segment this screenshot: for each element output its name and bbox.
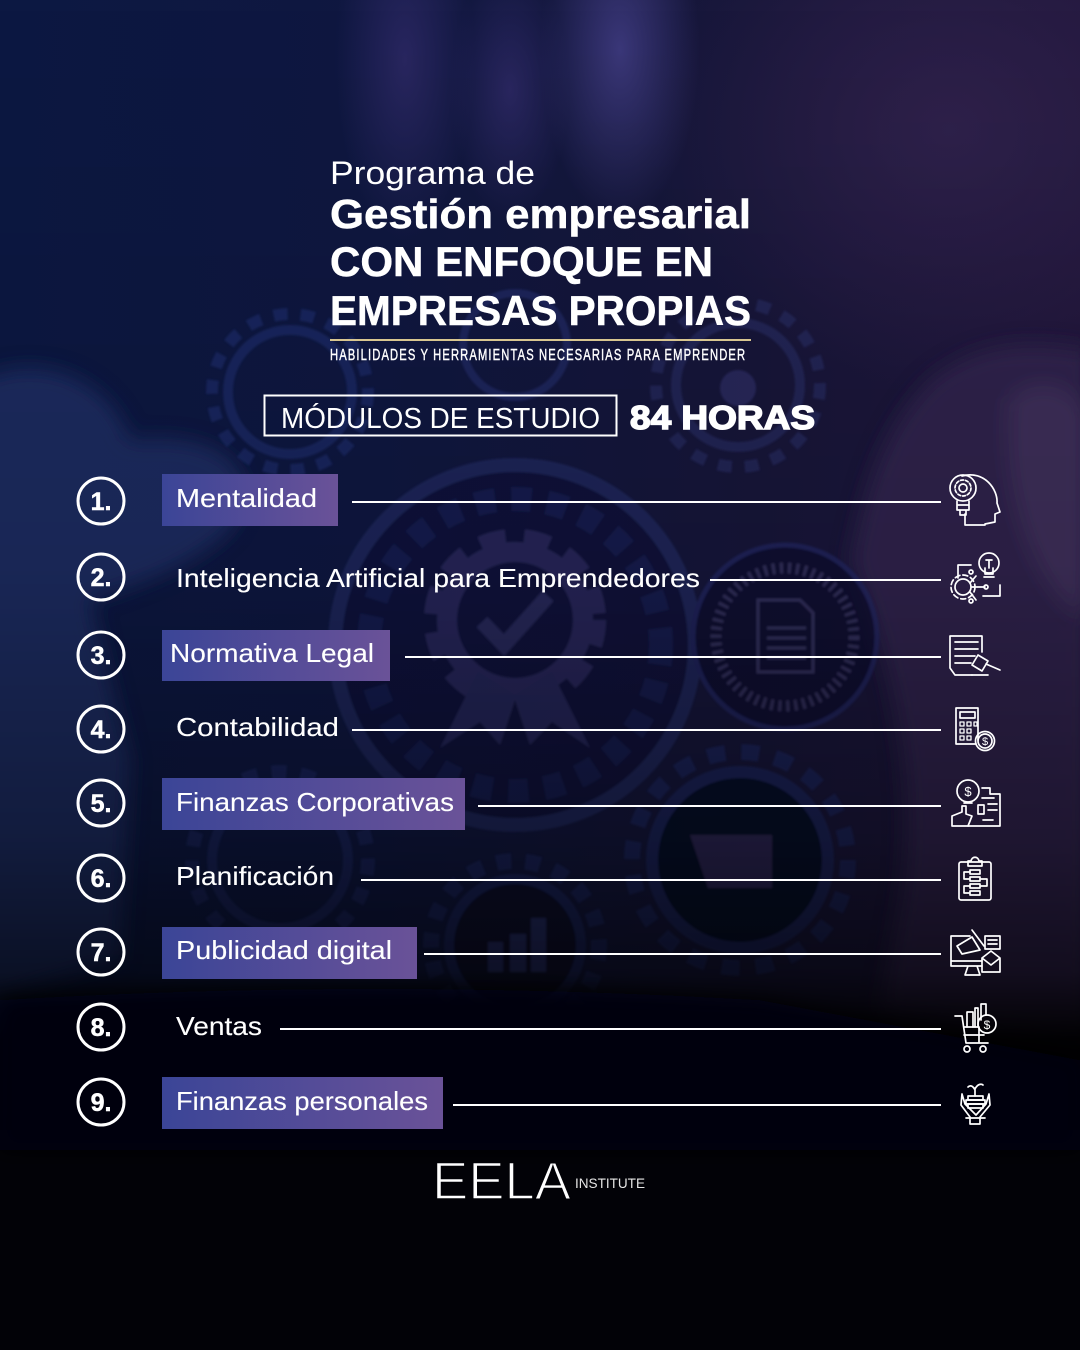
module 5: 5. (91, 790, 111, 818)
subtitle: HABILIDADES Y HERRAMIENTAS NECESARIAS PARA EMPRENDER (330, 345, 745, 363)
module 5: Finanzas Corporativas (176, 787, 454, 817)
module 5 (78, 778, 1000, 830)
title block: CON ENFOQUE EN (330, 238, 713, 285)
module 3: 3. (91, 642, 111, 670)
icon: idea, hand and report: $ (964, 784, 972, 799)
module 2: 2. (91, 564, 111, 592)
title block: Programa de (330, 155, 535, 191)
logo: EELA Institute (432, 1152, 645, 1211)
logo: EELA Institute: EELA (432, 1152, 572, 1211)
module 6: 6. (91, 865, 111, 893)
module 1: 1. (91, 488, 111, 516)
module 2 (78, 553, 1000, 603)
module 1: Mentalidad (176, 483, 317, 513)
modules heading box: MÓDULOS DE ESTUDIO (281, 402, 600, 435)
module 3 (78, 630, 1000, 681)
icon: head with gear bulb (950, 475, 1000, 525)
module 9: Finanzas personales (176, 1086, 428, 1116)
module 6: Planificación (176, 861, 334, 891)
module 8 (78, 1004, 996, 1052)
module 2: Inteligencia Artificial para Emprendedores (176, 563, 700, 593)
module 7 (78, 927, 1000, 979)
module 4: 4. (91, 716, 111, 744)
module 9: 9. (91, 1089, 111, 1117)
icon: shopping cart with coin (955, 1004, 996, 1052)
module 8: 8. (91, 1014, 111, 1042)
icon: shopping cart with coin: $ (984, 1018, 991, 1032)
module 4 (78, 706, 994, 752)
icon: hands holding coins and plant (961, 1084, 990, 1124)
icon: calculator and coin: $ (982, 736, 988, 748)
title block: EMPRESAS PROPIAS (330, 287, 751, 334)
icon: document and gavel (950, 636, 1000, 675)
title block: Gestión empresarial (330, 191, 751, 237)
icon: clipboard flowchart (959, 857, 991, 900)
module 7: 7. (91, 939, 111, 967)
module 1 (78, 474, 1000, 526)
icon: calculator and coin (956, 708, 994, 750)
module 9 (78, 1077, 990, 1129)
module 4: Contabilidad (176, 712, 339, 742)
hours label: 84 HORAS (630, 399, 815, 436)
icon: idea, hand and report (952, 780, 1000, 826)
title block (330, 155, 751, 334)
icon: AI gear and bulb (951, 553, 1000, 603)
module 6 (78, 855, 991, 901)
module 3: Normativa Legal (170, 638, 374, 668)
module 7: Publicidad digital (176, 935, 392, 965)
module 8: Ventas (176, 1011, 262, 1041)
gold divider (330, 339, 751, 341)
icon: monitor, megaphone and mail (951, 930, 1000, 975)
logo: EELA Institute: INSTITUTE (575, 1175, 645, 1191)
